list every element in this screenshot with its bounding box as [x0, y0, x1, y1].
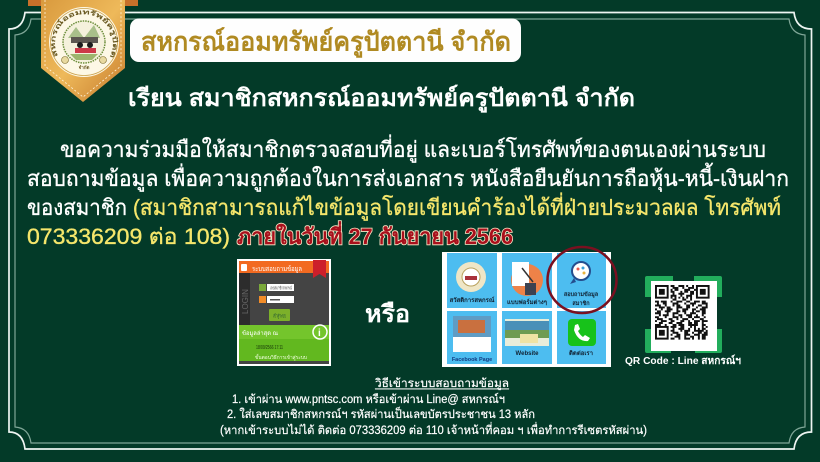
screenshot: login screen: เข้าสู่ระบบ — [273, 312, 286, 320]
screenshot: app menu grid — [442, 247, 616, 367]
menu tile: forms — [502, 253, 552, 308]
screenshot: login screen: LOGIN — [241, 289, 250, 314]
text block: request paragraph: ขอความร่วมมือให้สมาชิกตรวจสอบที่อยู่ และเบอร์โทรศัพท์ของตนเองผ่านระบบ — [60, 134, 766, 163]
text block: request paragraph — [27, 134, 789, 249]
QR code: Line — [645, 276, 722, 353]
heading: addressed to members: เรียน สมาชิกสหกรณ์ออมทรัพย์ครูปัตตานี จำกัด — [128, 84, 635, 113]
menu tile: contact us: ติดต่อเรา — [569, 349, 593, 357]
menu tile: member data enquiry — [557, 253, 606, 308]
text block: request paragraph: สอบถามข้อมูล เพื่อความถูกต้องในการส่งเอกสาร หนังสือยืนยันการถือหุ้น-หนี้-เงินฝาก — [27, 163, 789, 192]
icon: gold ribbon with cooperative seal — [28, 0, 138, 102]
menu tile: website: Website — [516, 351, 539, 357]
screenshot: login screen — [237, 259, 331, 366]
text block: request paragraph: (สมาชิกสามารถแก้ไขข้อมูลโดยเขียนคำร้องได้ที่ฝ่ายประมวลผล โทรศัพท์ — [133, 192, 781, 221]
heading: how to log in: วิธีเข้าระบบสอบถามข้อมูล — [374, 377, 509, 390]
menu tile: welfare — [447, 253, 497, 308]
menu tile: member data enquiry: สมาชิก — [572, 300, 590, 307]
menu tile: welfare: สวัสดิการสหกรณ์ — [450, 296, 495, 304]
header: organisation name: สหกรณ์ออมทรัพย์ครูปัตตานี จำกัด — [141, 26, 511, 58]
header: organisation name — [130, 18, 521, 62]
text block: request paragraph: ของสมาชิก — [27, 195, 127, 220]
label: or: หรือ — [365, 301, 410, 328]
menu tile: facebook page — [447, 311, 497, 364]
screenshot: login screen: ข้อมูลล่าสุด ณ — [242, 330, 278, 337]
screenshot: login screen: i — [318, 328, 321, 339]
screenshot: login screen: ระบบสอบถามข้อมูล — [252, 265, 302, 273]
highlight circle — [548, 247, 616, 313]
screenshot: login screen: 18/09/2566 17:11 — [256, 345, 283, 351]
menu tile: forms: แบบฟอร์มต่างๆ — [507, 298, 547, 306]
text block: request paragraph: ภายในวันที่ 27 กันยายน 2566 — [237, 220, 513, 249]
menu tile: facebook page: Facebook Page — [452, 357, 492, 363]
menu tile: website — [502, 311, 552, 364]
screenshot: login screen: เลขสมาชิกสหกรณ์ — [270, 284, 292, 290]
icon: gold ribbon with cooperative seal: จำกัด — [79, 64, 89, 70]
menu tile: contact us — [557, 311, 606, 364]
text block: how to access the system: 1. เข้าผ่าน www.pntsc.com หรือเข้าผ่าน Line@ สหกรณ์ฯ — [232, 392, 505, 406]
text block: how to access the system — [220, 377, 647, 437]
caption: QR code: QR Code : Line สหกรณ์ฯ — [625, 354, 741, 367]
text block: how to access the system: 2. ใส่เลขสมาชิกสหกรณ์ฯ รหัสผ่านเป็นเลขบัตรประชาชน 13 หลัก — [227, 406, 535, 421]
menu tile: member data enquiry: สอบถามข้อมูล — [564, 290, 599, 299]
screenshot: login screen: ขั้นตอนวิธีการเข้าสู่ระบบ — [255, 352, 307, 361]
text block: how to access the system: (หากเข้าระบบไม่ได้ ติดต่อ 073336209 ต่อ 110 เจ้าหน้าที่คอม ฯ เพื่อทำการรีเซตรหัสผ่าน) — [220, 422, 647, 437]
text block: request paragraph: 073336209 ต่อ 108) — [27, 224, 230, 249]
